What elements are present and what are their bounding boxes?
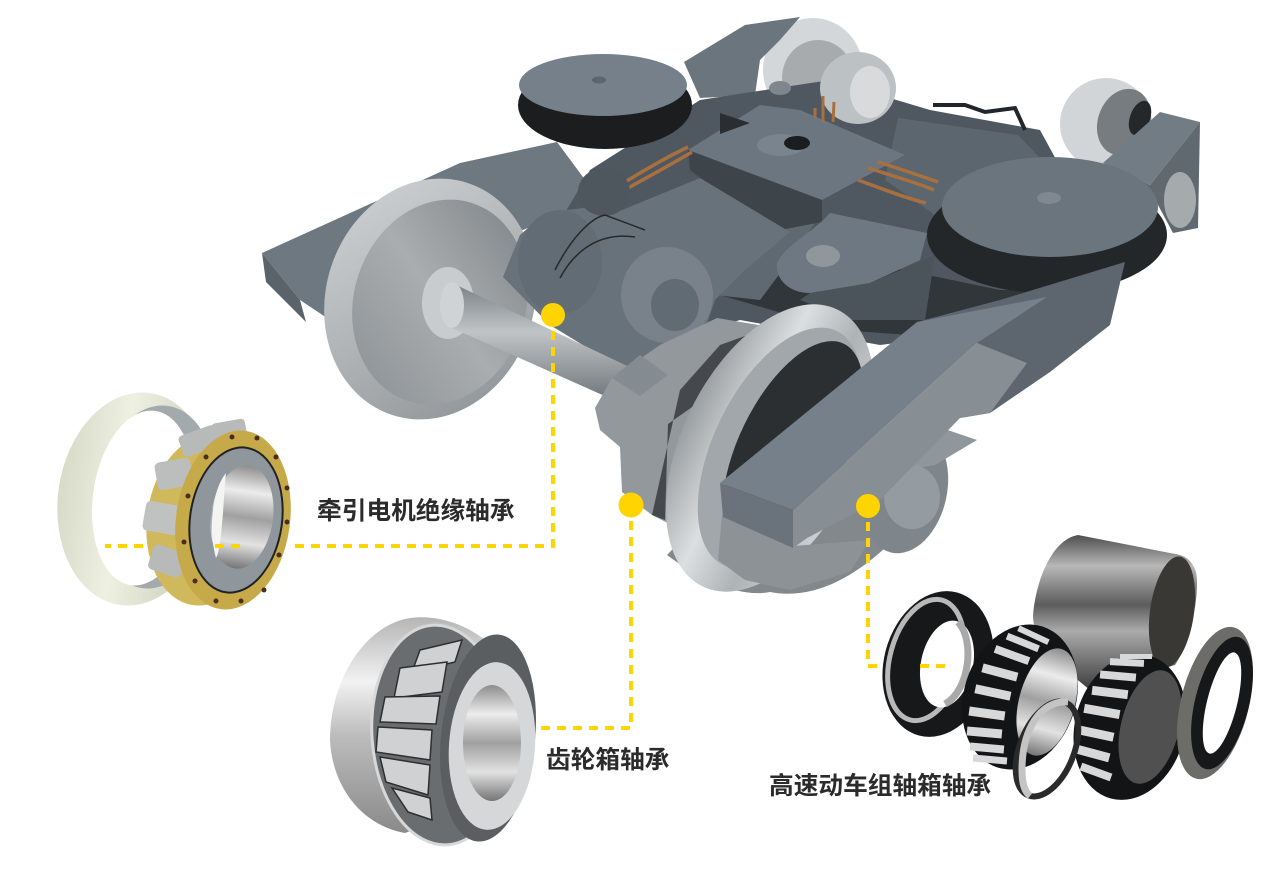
- underbody lump: [667, 500, 885, 594]
- bogie illustration: [262, 17, 1200, 625]
- gold flange: [164, 423, 302, 617]
- insulated outer ring: [44, 382, 227, 616]
- rear top frame: [684, 17, 800, 98]
- rollers: [376, 640, 462, 820]
- spacer ring: [1003, 693, 1091, 805]
- second cone rollers: [1075, 654, 1152, 781]
- far wheel right: [1060, 78, 1160, 170]
- leader: gearbox: [535, 505, 631, 728]
- rear frame left beam: [262, 142, 600, 322]
- air spring left: [518, 54, 692, 149]
- label: traction motor insulated bearing: 牵引电机绝缘轴承: [317, 497, 515, 525]
- traction motor right: [885, 105, 1042, 215]
- suspension arm: [777, 213, 935, 320]
- roller cage: [364, 621, 516, 849]
- rollers and cage: [136, 418, 274, 613]
- outer cup: [330, 617, 485, 833]
- gearbox and motor: [503, 168, 790, 380]
- traction motor bearing: [44, 382, 302, 617]
- copper wires top: [815, 96, 834, 122]
- right seal: [1163, 619, 1267, 787]
- sleeve: [1033, 535, 1202, 690]
- cone rim: [430, 630, 546, 846]
- cone face: [443, 659, 541, 833]
- high-speed axle box bearing: [867, 535, 1267, 813]
- left seal: [867, 579, 1009, 749]
- first tapered cone: [944, 609, 1096, 785]
- second tapered cone: [1058, 641, 1202, 813]
- left wheel: [293, 151, 567, 447]
- wheel lower web: [718, 515, 870, 590]
- center plate: [688, 81, 905, 232]
- central body: [520, 80, 1100, 360]
- label: gearbox bearing: 齿轮箱轴承: [546, 746, 670, 774]
- front beam far section: [917, 262, 1125, 418]
- front beam top: [720, 297, 1047, 510]
- leader lines: [105, 315, 948, 728]
- front beam side: [793, 343, 1027, 548]
- front beam end: [720, 483, 793, 548]
- front wheel: [623, 271, 917, 625]
- rear top wheel: [763, 18, 863, 122]
- rear wheel inner: [820, 52, 896, 124]
- rear end box: [1103, 112, 1200, 233]
- copper wires right: [858, 162, 938, 203]
- gear housing front: [595, 318, 770, 560]
- axle: [452, 283, 640, 405]
- leader: traction motor: [105, 315, 553, 546]
- inner ring face: [179, 440, 293, 600]
- axle box: [851, 419, 977, 561]
- copper wires left: [600, 147, 692, 210]
- label: high-speed EMU axle box bearing: 高速动车组轴箱轴承: [769, 772, 992, 800]
- gearbox block right: [690, 155, 820, 300]
- air spring right: [927, 157, 1167, 293]
- leader: axle box: [868, 506, 948, 666]
- axle collar: [440, 282, 464, 328]
- dark underside: [720, 195, 1060, 340]
- flange rivets: [182, 434, 290, 604]
- gearbox tapered bearing: [330, 617, 546, 849]
- first cone rollers: [967, 626, 1050, 764]
- marker dots: [541, 303, 880, 518]
- bore: [463, 685, 521, 801]
